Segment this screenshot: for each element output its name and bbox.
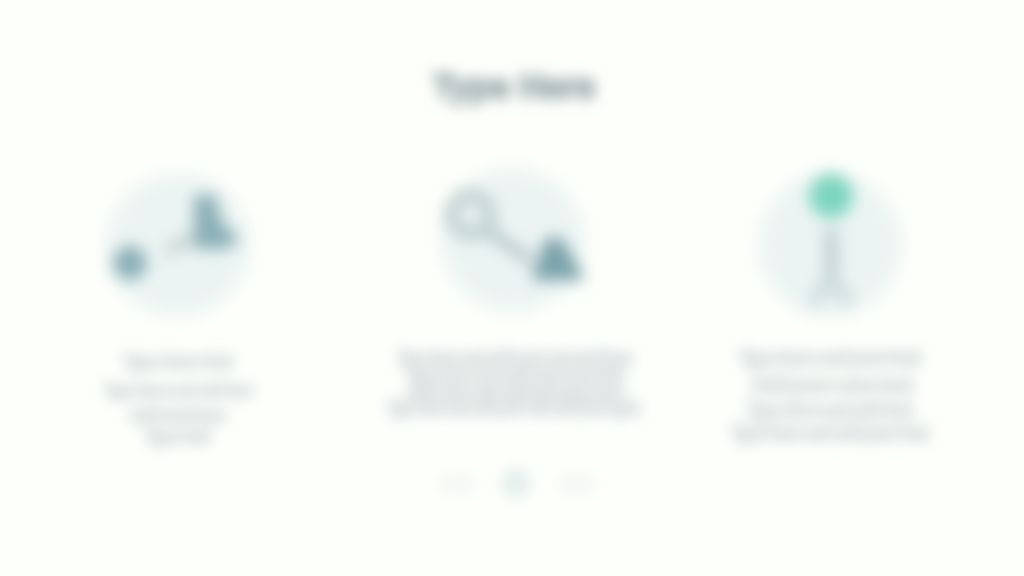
text block: middle: Type here and add your own text here — [398, 348, 632, 368]
text block: left — [105, 352, 251, 446]
text block: right: Type here and your text — [740, 348, 920, 368]
icon circle: right — [758, 173, 902, 317]
text block: left: Type here text — [124, 352, 232, 371]
text block: left: Type here and add text — [105, 381, 251, 400]
panel: left step — [105, 173, 251, 446]
title: Type Here — [433, 68, 595, 106]
text block: right: Add your own text — [752, 375, 912, 395]
icon circle: middle — [441, 168, 585, 312]
text block: right — [732, 348, 928, 443]
panel: right step — [732, 173, 928, 443]
icon: magnifier and triangle — [452, 196, 585, 280]
text block: middle — [388, 348, 640, 418]
icon: connected nodes — [113, 195, 240, 280]
icon: branching tree — [809, 174, 853, 304]
icon circle: left — [106, 173, 250, 317]
panel: middle step — [388, 168, 640, 418]
text block: left: Type text — [146, 427, 210, 446]
text block: left: Add text here — [130, 406, 226, 425]
text block: middle: Add your own text and type here — [407, 382, 623, 402]
pagination — [441, 469, 594, 497]
text block: middle: Type here and add your own text — [407, 365, 623, 385]
text block: middle: Type here and add your own text here again — [388, 398, 640, 418]
text block: right: Type here and add your text — [732, 423, 928, 443]
text block: right: Type here and add text — [748, 400, 912, 420]
